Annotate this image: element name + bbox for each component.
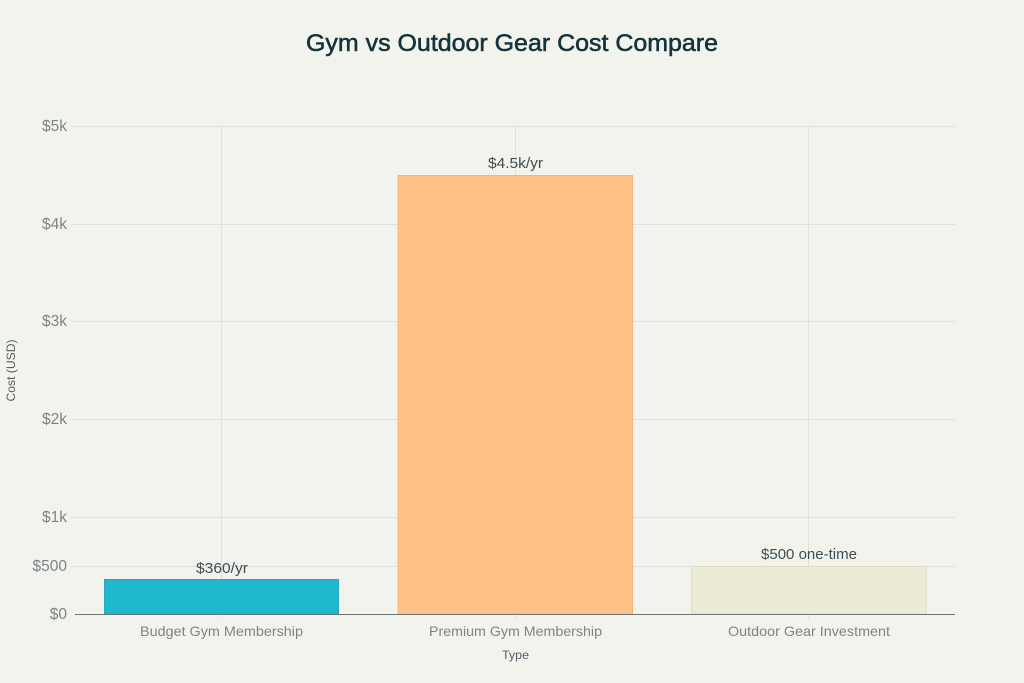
title: Gym vs Outdoor Gear Cost Compare xyxy=(306,30,718,57)
x axis title: Type xyxy=(502,648,529,662)
value label: outdoor: $500 one-time xyxy=(761,546,857,563)
y axis tick labels: $1k xyxy=(42,509,67,526)
bar: premium gym membership xyxy=(398,176,632,614)
x axis category labels xyxy=(140,623,890,639)
y axis title: Cost (USD) xyxy=(4,339,18,402)
x axis category labels: Budget Gym Membership xyxy=(140,623,303,639)
y axis tick labels: $0 xyxy=(50,606,67,623)
y axis tick labels: $2k xyxy=(42,411,67,428)
x axis category labels: Outdoor Gear Investment xyxy=(728,623,890,639)
y axis tick labels: $500 xyxy=(33,558,67,575)
bar: budget gym membership xyxy=(104,580,338,614)
y axis tick labels: $5k xyxy=(42,118,67,135)
x axis category labels: Premium Gym Membership xyxy=(429,623,602,639)
y axis tick labels: $4k xyxy=(42,216,67,233)
bar: outdoor gear investment xyxy=(692,566,926,614)
y axis tick labels: $3k xyxy=(42,313,67,330)
value label: budget: $360/yr xyxy=(196,560,248,577)
y axis tick labels xyxy=(33,118,67,623)
value label: premium: $4.5k/yr xyxy=(488,155,543,172)
